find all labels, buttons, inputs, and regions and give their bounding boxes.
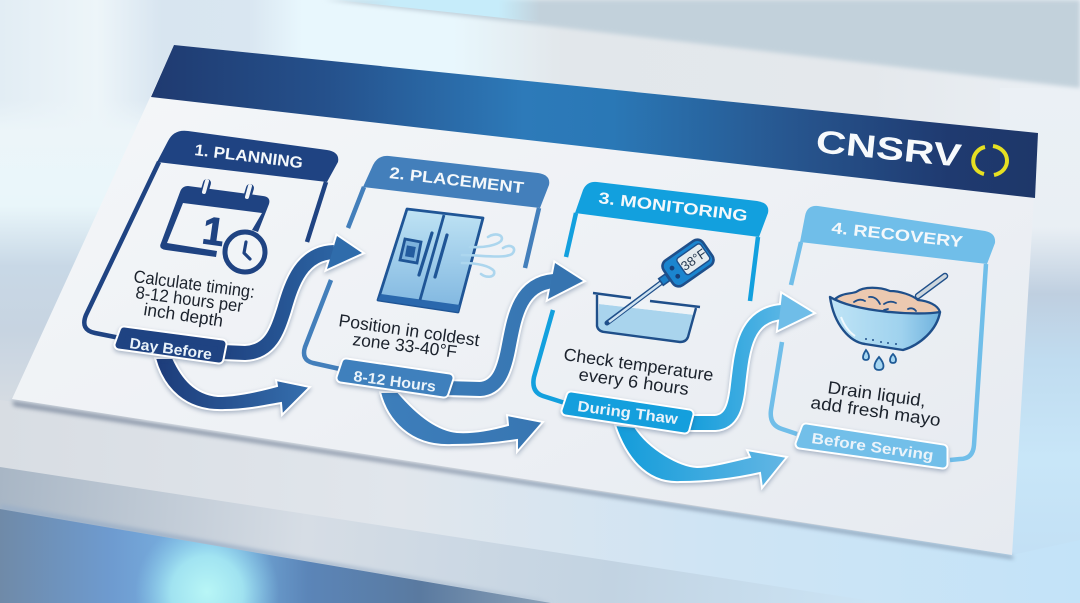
panel 4 description: Drain liquid, xyxy=(826,377,927,411)
panel 2 title: 2. PLACEMENT xyxy=(389,165,525,197)
panel 1 description: 8-12 hours per xyxy=(134,282,244,316)
panel 4 timing tag xyxy=(800,428,943,465)
icon: refrigerator with cold air xyxy=(378,209,514,312)
panel: 4. Recovery xyxy=(771,206,995,465)
paper shadow xyxy=(12,401,1014,559)
panel 1 header bar xyxy=(157,131,338,182)
panel 3 frame xyxy=(533,213,758,403)
panel 3 timing tag: During Thaw xyxy=(576,398,679,428)
arrow: planning to placement (lower) xyxy=(155,358,310,415)
panel 4 header bar xyxy=(800,206,995,264)
panel 4 description xyxy=(809,377,942,430)
panel 1 description xyxy=(132,266,256,331)
panel 3 header bar xyxy=(575,182,768,237)
panel 3 title: 3. MONITORING xyxy=(598,190,748,225)
panel 3 description: Check temperature xyxy=(562,344,715,385)
panel 4 frame xyxy=(771,242,986,460)
panel 2 description: Position in coldest xyxy=(337,310,481,350)
panel 2 frame xyxy=(304,187,539,369)
panel 3 description: every 6 hours xyxy=(577,364,690,399)
panel 4 description: add fresh mayo xyxy=(809,392,942,430)
panel 1 description: Calculate timing: xyxy=(132,266,256,302)
panel 1 timing tag: Day Before xyxy=(128,335,213,364)
panel 1 timing tag xyxy=(119,331,222,364)
icon: thermometer in container xyxy=(593,237,716,342)
panel 2 timing tag: 8-12 Hours xyxy=(352,368,437,396)
panel 4 title: 4. RECOVERY xyxy=(831,220,964,251)
arrow: placement to monitoring (upper) xyxy=(445,263,583,389)
panel: 2. Placement xyxy=(304,156,583,452)
panel 4 timing tag: Before Serving xyxy=(810,430,935,465)
logo mark: yellow brackets xyxy=(973,146,1007,175)
panel 2 timing tag xyxy=(341,363,449,396)
panel 2 description: zone 33-40°F xyxy=(352,329,458,362)
logo: CNSRV: CNSRV xyxy=(814,123,964,174)
arrow: placement to monitoring (lower) xyxy=(380,392,543,452)
logo: CNSRV xyxy=(814,123,1007,175)
icon: thermometer in container: 38°F xyxy=(678,246,709,274)
arrow: monitoring to recovery (lower) xyxy=(615,425,787,488)
icon: bowl draining liquid xyxy=(830,276,945,370)
arrow: monitoring to recovery (upper) xyxy=(688,294,813,423)
panel: 1. Planning xyxy=(84,131,362,415)
panel 3 timing tag xyxy=(566,396,689,429)
panel 2 header bar xyxy=(363,156,549,208)
icon: calendar with clock xyxy=(160,181,269,272)
panel 1 title: 1. PLANNING xyxy=(194,142,304,172)
arrow: planning to placement (upper) xyxy=(222,236,362,353)
panel: 3. Monitoring xyxy=(533,182,813,488)
header banner xyxy=(151,45,1038,198)
panel 1 description: inch depth xyxy=(142,299,224,331)
icon: calendar with clock: 1 xyxy=(200,209,227,255)
panel 1 frame xyxy=(84,162,326,338)
